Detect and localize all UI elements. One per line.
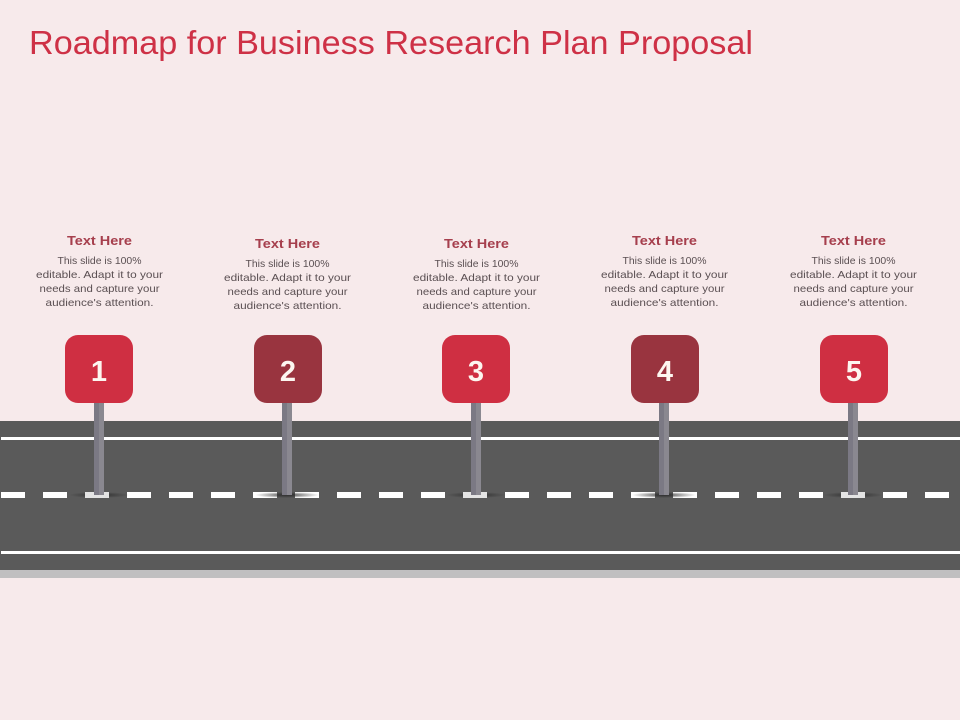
- text block 2: editable. Adapt it to your: [224, 272, 352, 284]
- text block 4: audience's attention.: [610, 297, 718, 309]
- text block 3: audience's attention.: [422, 300, 530, 312]
- signpost 2: 2: [280, 356, 296, 388]
- text block 3: Text Here: [444, 236, 509, 251]
- text block 4: editable. Adapt it to your: [601, 269, 729, 281]
- text block 4: This slide is 100%: [622, 255, 706, 267]
- signpost 5: 5: [846, 356, 862, 388]
- text block 2: needs and capture your: [228, 286, 348, 298]
- text block 2: audience's attention.: [234, 300, 342, 312]
- text block 1: This slide is 100%: [58, 255, 142, 267]
- text block 1: editable. Adapt it to your: [36, 269, 164, 281]
- text block 5: This slide is 100%: [812, 255, 896, 267]
- text block 5: needs and capture your: [794, 283, 914, 295]
- text block 5: editable. Adapt it to your: [790, 269, 918, 281]
- text block 2: [224, 236, 352, 312]
- road: [0, 421, 960, 578]
- signpost 3: [442, 335, 510, 498]
- signpost 5: [820, 335, 888, 498]
- text block 1: audience's attention.: [46, 297, 154, 309]
- signpost 4: [631, 335, 699, 498]
- signpost 4: 4: [657, 356, 673, 388]
- text block 4: [601, 233, 729, 309]
- title: Roadmap for Business Research Plan Proposal: [29, 25, 753, 62]
- text block 1: Text Here: [67, 233, 132, 248]
- text block 3: editable. Adapt it to your: [413, 272, 541, 284]
- signpost 1: [65, 335, 133, 498]
- text block 2: This slide is 100%: [246, 258, 330, 270]
- text block 3: [413, 236, 541, 312]
- signpost 1: 1: [91, 356, 107, 388]
- text block 3: needs and capture your: [416, 286, 537, 298]
- text block 5: [790, 233, 918, 309]
- text block 4: needs and capture your: [604, 283, 725, 295]
- text block 3: This slide is 100%: [434, 258, 518, 270]
- text block 4: Text Here: [632, 233, 697, 248]
- signpost 3: 3: [468, 356, 484, 388]
- text block 5: Text Here: [821, 233, 886, 248]
- text block 1: [36, 233, 164, 309]
- text block 2: Text Here: [255, 236, 320, 251]
- signpost 2: [254, 335, 322, 498]
- text block 5: audience's attention.: [800, 297, 908, 309]
- text block 1: needs and capture your: [40, 283, 160, 295]
